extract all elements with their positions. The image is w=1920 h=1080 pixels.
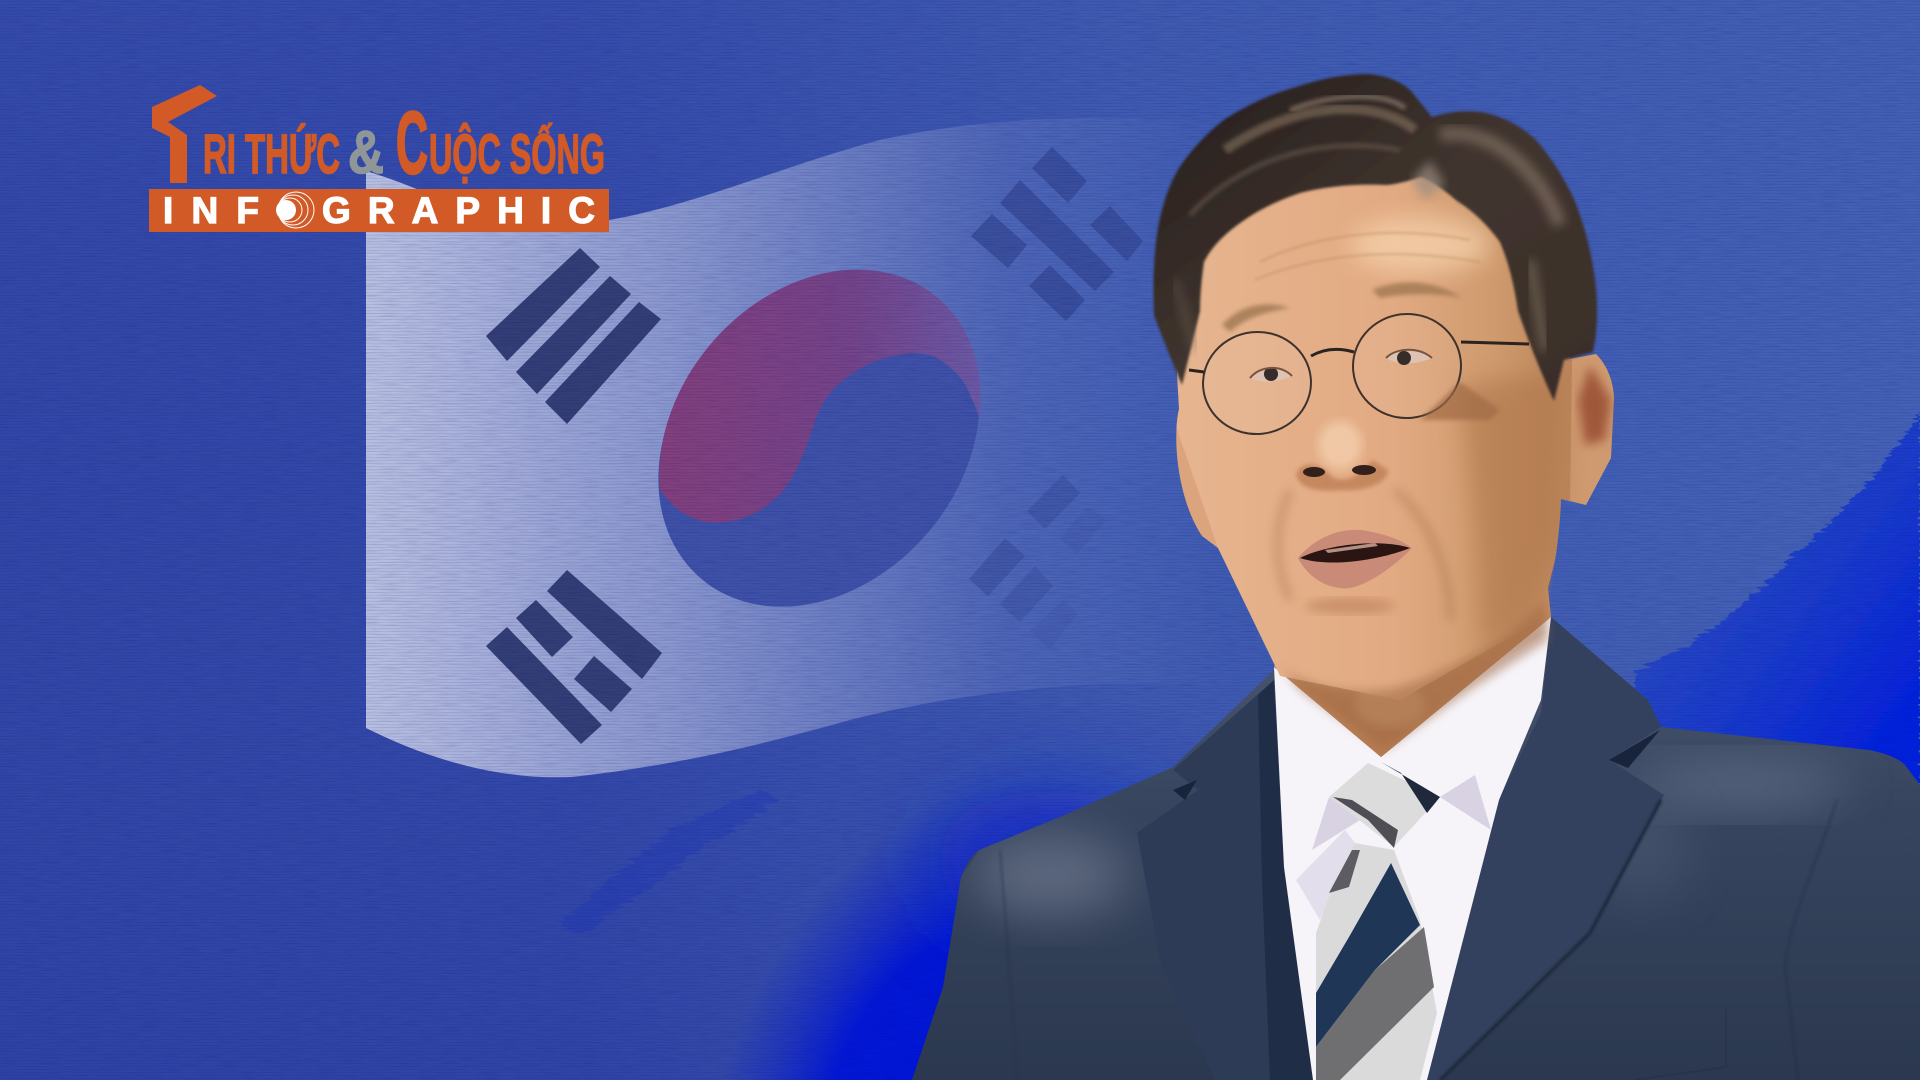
eyes (1250, 350, 1432, 382)
hair (1153, 74, 1597, 401)
logo ampersand: & (348, 119, 384, 186)
trigram bottom right (969, 475, 1107, 649)
lapel notch left (1173, 780, 1197, 800)
necktie (1316, 762, 1440, 1080)
eyebrows (1222, 282, 1462, 332)
taegeuk symbol (592, 209, 1046, 671)
band text GRAPHIC: GRAPHIC (322, 190, 595, 231)
South Korean flag (366, 118, 1225, 777)
portrait of man (912, 74, 1920, 1080)
trigram top left (486, 248, 661, 424)
taegeuk red half (659, 270, 981, 523)
neck (1274, 560, 1551, 757)
right lapel crease (1440, 800, 1661, 1080)
logo (149, 85, 609, 232)
left lapel (1137, 680, 1313, 1080)
forehead highlight (1350, 217, 1490, 273)
logo T mark (152, 85, 217, 183)
nose (1296, 421, 1388, 491)
glasses shadow (1420, 382, 1500, 420)
glasses (1189, 309, 1529, 439)
infographic band (149, 189, 609, 232)
lapel notch right (1609, 730, 1660, 768)
chin shadow (1282, 600, 1548, 750)
flag cloth (366, 118, 1225, 777)
neck highlight (1355, 683, 1425, 727)
trigram bottom left (486, 570, 662, 744)
mouth (1298, 530, 1412, 588)
logo text tri thuc: RI THỨC (203, 122, 340, 185)
left inner panel shadow (1258, 680, 1313, 1080)
shirt (1274, 617, 1551, 1080)
suit jacket (912, 617, 1920, 1080)
trigram top right (971, 147, 1143, 321)
face (1170, 150, 1575, 700)
mouth shadow (1305, 598, 1395, 614)
taegeuk blue half (592, 209, 1046, 671)
nasolabial folds (1278, 490, 1450, 620)
band globe O icon (276, 192, 314, 228)
blue brush stroke right (1635, 412, 1920, 790)
ear left (1176, 409, 1218, 548)
logo letter C: C (396, 93, 428, 192)
blue brush stroke bottom (560, 700, 1200, 1080)
band text INF: INF (163, 190, 259, 231)
face shadow right (1460, 370, 1565, 650)
forehead wrinkles (1255, 233, 1480, 280)
logo text cuoc song: UỘC SỐNG (429, 122, 605, 185)
right lapel (1427, 617, 1664, 1080)
ear right (1561, 354, 1614, 505)
